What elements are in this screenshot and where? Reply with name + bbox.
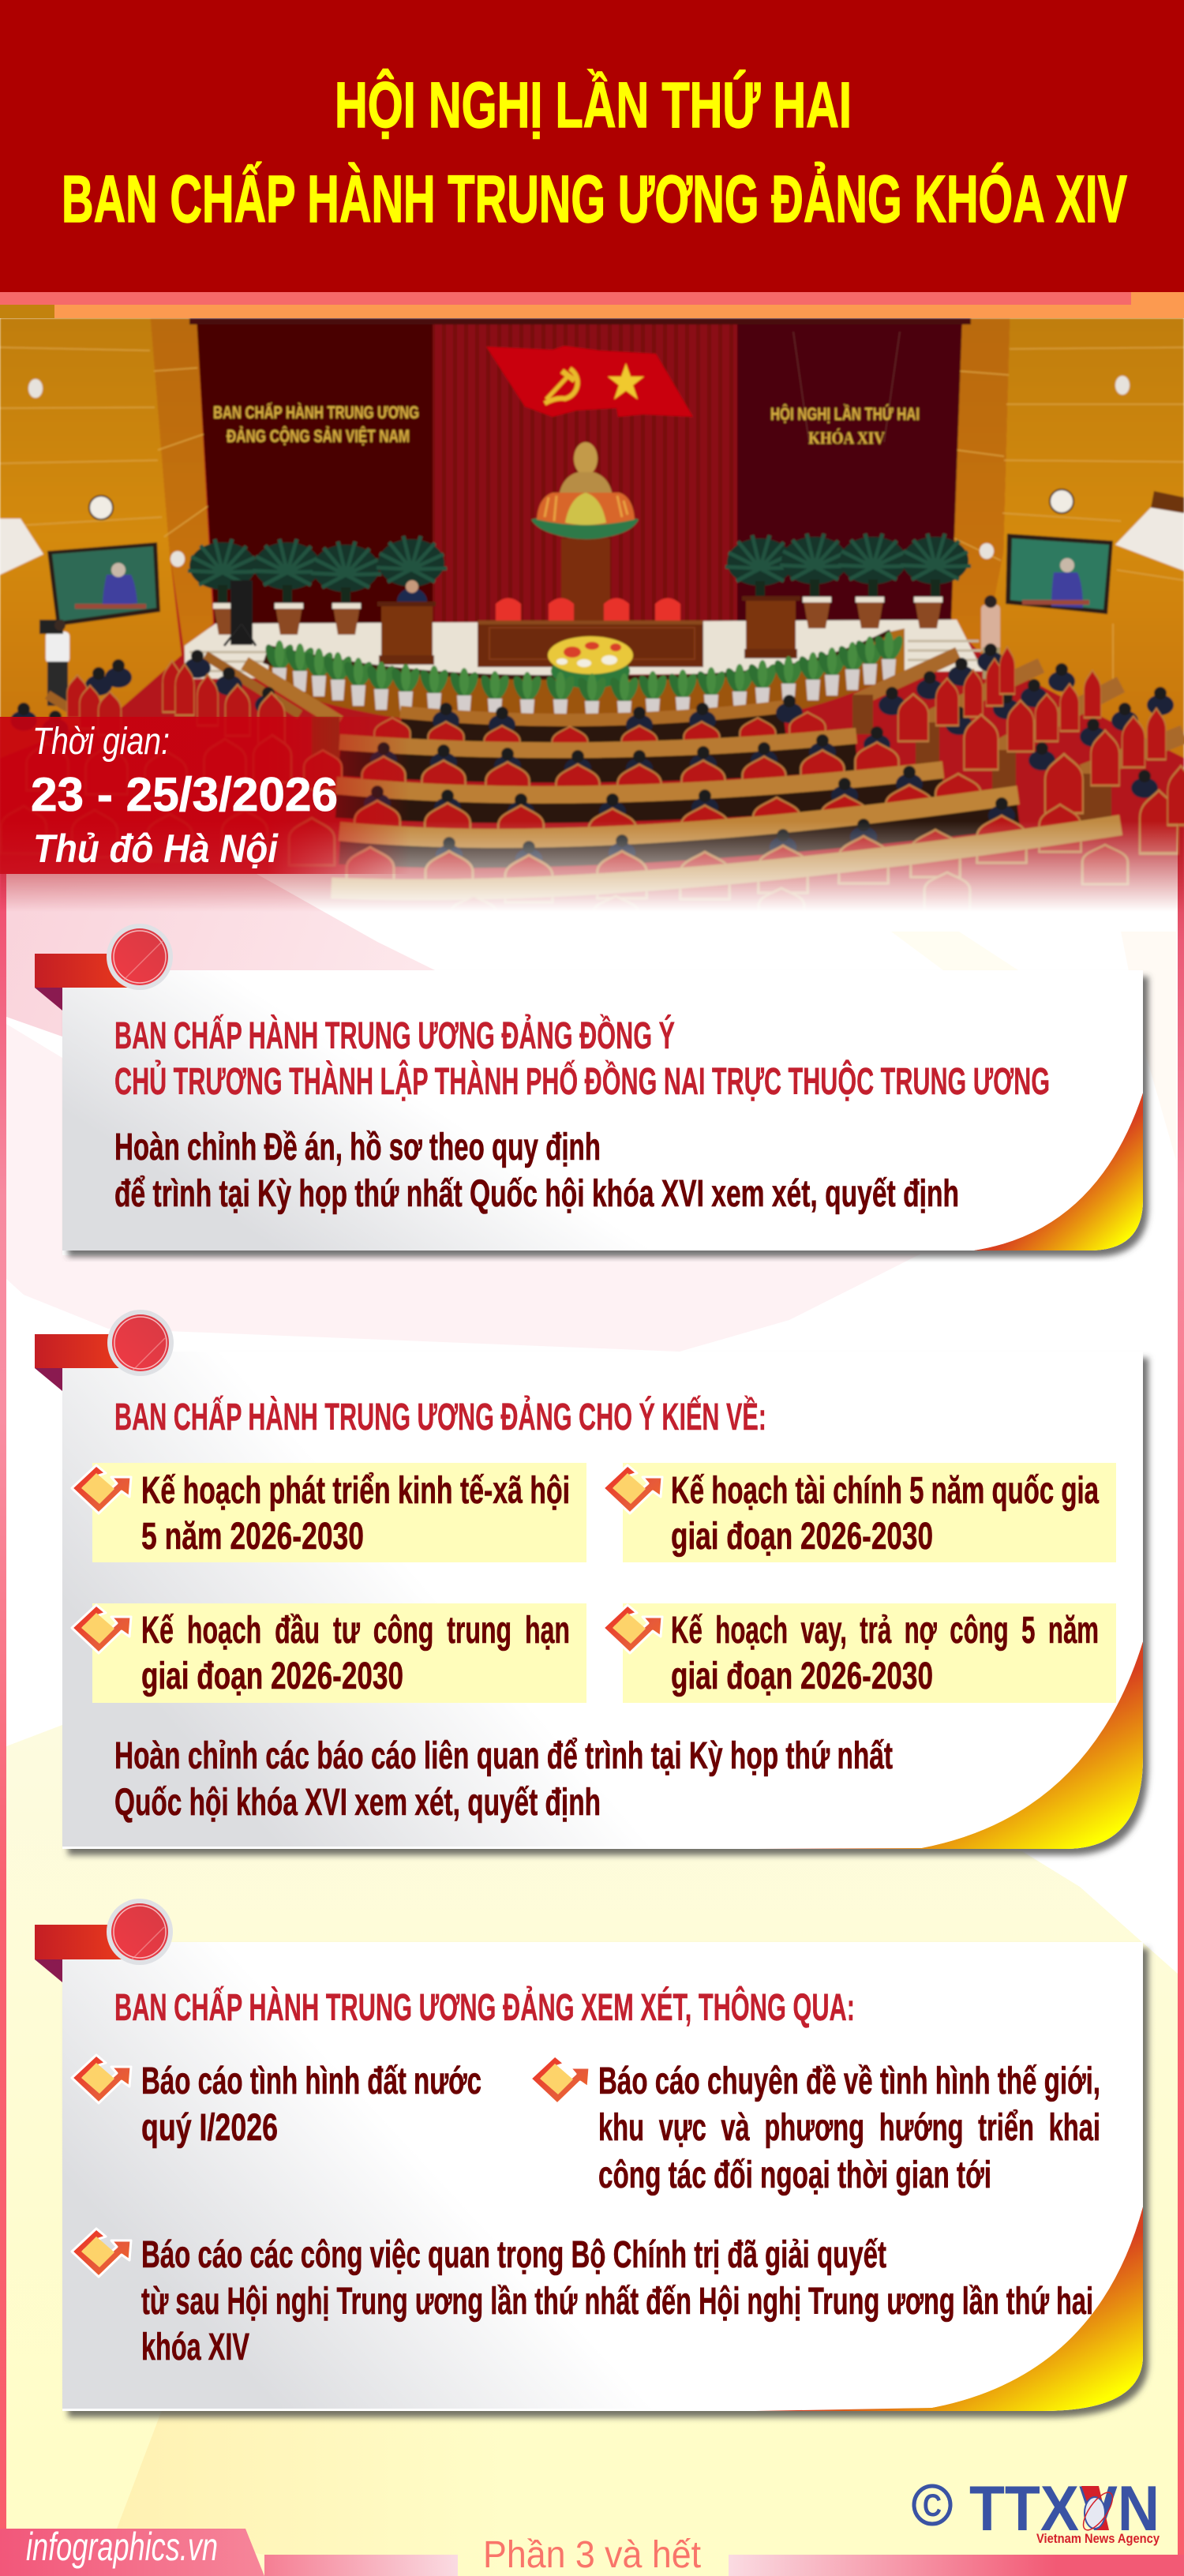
logo: TTXVN: TTXVN [969,2473,1160,2544]
podium flowers [548,636,633,688]
place: Thủ đô Hà Nội [33,827,279,871]
wall lettering: ĐẢNG CỘNG SẢN VIỆT NAM [227,426,410,446]
heading: BAN CHẤP HÀNH TRUNG ƯƠNG ĐẢNG CHO Ý KIẾN VỀ: [114,1395,766,1438]
item: Bộ Chính trị [72,2229,1093,2368]
panel: photo of the conference hall [0,318,1184,936]
item: đầu tư công [72,1603,586,1703]
row B of centre seating [302,725,901,792]
label: thời gian: Thời gian: [32,721,170,763]
item: vay, trả nợ công [603,1603,1116,1703]
header banner [0,0,1184,318]
date and place band [0,717,410,874]
right wall [951,318,1184,758]
heading [114,1014,1050,1103]
ribbon and badge [35,1899,173,1982]
cameramen [39,580,1000,706]
item: tài chính [603,1463,1116,1562]
item: tình hình thế giới: công tác đối ngoại thời gian tới [598,2154,991,2196]
item: kinh tế-xã hội [72,1463,586,1562]
clocks and dome cameras [28,376,1130,567]
back wall panels and curtain [189,318,971,626]
closing text [114,1735,893,1824]
lecterns, speaker and presidium desk [377,580,800,667]
wall lettering: BAN CHẤP HÀNH TRUNG ƯƠNG [213,403,419,422]
stage floor, steps and barrier [185,620,983,730]
logo: TTXVN: Vietnam News Agency [1036,2531,1160,2546]
row A of centre seating [373,693,827,744]
potted cycads [188,534,971,635]
row E of centre seating [332,825,1128,936]
ribbon and badge [35,1310,174,1391]
item: đầu tư công: giai đoạn 2026-2030 [141,1655,403,1697]
item: tình hình thế giới [530,2056,1100,2196]
wall lettering: HỘI NGHỊ LẦN THỨ HAI [770,404,920,424]
website label: infographics.vn [26,2525,218,2569]
item: tình hình đất nước: quý I/2026 [141,2107,278,2149]
panel: card 3 [35,1899,1143,2411]
bust and pedestal [531,442,639,621]
item: đầu tư công: Kế hoạch đầu tư công trung hạn [141,1610,570,1652]
item: tài chính: giai đoạn 2026-2030 [671,1516,933,1558]
white wall wedges [0,491,1184,575]
item: kinh tế-xã hội: Kế hoạch phát triển kinh tế-xã hội [141,1470,570,1512]
footer [0,2525,1184,2576]
body text [114,1127,959,1215]
left wing seating [1,650,339,865]
item: tình hình đất nước: Báo cáo tình hình đất nước [141,2060,481,2102]
row C of centre seating [335,759,982,830]
flag with hammer and sickle and star [486,346,693,417]
wall lettering [213,403,920,448]
item: Bộ Chính trị: khóa XIV [141,2327,249,2368]
logo: TTXVN: C [923,2488,942,2523]
row D of centre seating [339,795,1081,902]
plant row [262,632,906,722]
date: 23 - 25/3/2026 [31,768,338,821]
left wall [0,318,213,758]
panel: card 2 [35,1310,1143,1849]
part label: Phần 3 và hết [483,2534,701,2576]
item: tình hình đất nước [72,2055,481,2149]
screens [47,534,1113,626]
right wing desks and seats [852,643,1184,853]
body text: Hoàn chỉnh Đề án, hồ sơ theo quy định [114,1127,601,1168]
ribbon and badge [35,924,173,1011]
closing text: Quốc hội khóa XVI xem xét, quyết định [114,1782,601,1824]
heading: BAN CHẤP HÀNH TRUNG ƯƠNG ĐẢNG ĐỒNG Ý [114,1014,675,1057]
item: vay, trả nợ công: giai đoạn 2026-2030 [671,1655,933,1697]
title line 1: HỘI NGHỊ LẦN THỨ HAI [335,69,852,141]
panel: card 1 [35,924,1143,1251]
item: kinh tế-xã hội: 5 năm 2026-2030 [141,1516,364,1558]
wall lettering: KHÓA XIV [808,428,885,448]
